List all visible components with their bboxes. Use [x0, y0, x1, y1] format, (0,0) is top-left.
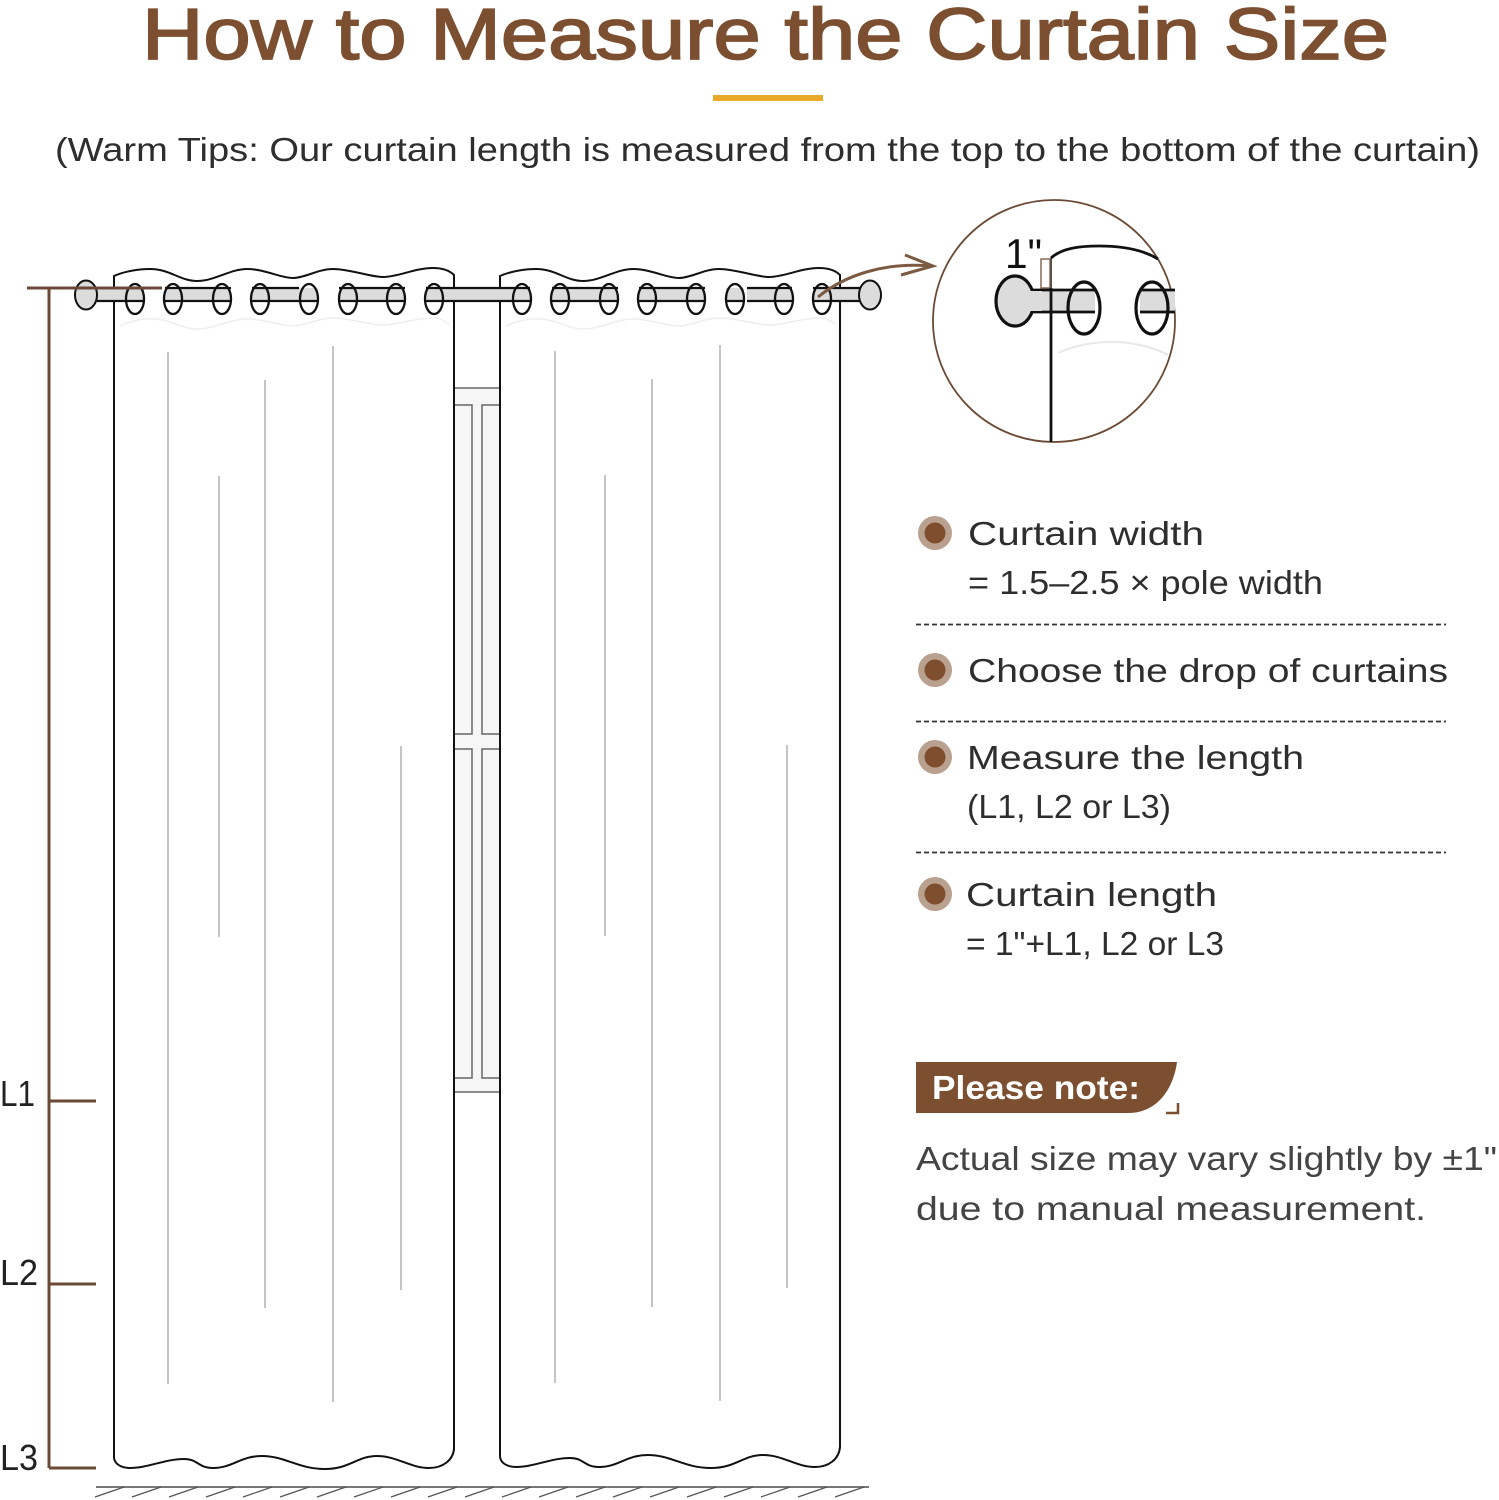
detail circle: 1 inch allowance — [933, 200, 1175, 442]
curtain: left panel — [114, 268, 454, 1469]
floor — [95, 1487, 869, 1497]
step: curtain width: Curtain width — [968, 515, 1204, 552]
note text — [916, 1140, 1497, 1227]
step: curtain length: = 1"+L1, L2 or L3 — [966, 925, 1224, 962]
window behind curtains — [454, 388, 500, 1092]
step: curtain width — [918, 515, 1323, 601]
step: measure the length — [918, 739, 1304, 825]
step: choose the drop: Choose the drop of curtains — [968, 652, 1448, 689]
title underline — [713, 95, 823, 101]
label L1: L1 — [0, 1073, 35, 1114]
curtain rod with grommets — [75, 280, 881, 314]
arrow to detail circle — [818, 255, 933, 297]
note text: due to manual measurement. — [916, 1190, 1426, 1227]
badge: please note — [916, 1062, 1178, 1113]
length ruler — [27, 288, 162, 1468]
note text: Actual size may vary slightly by ±1" — [916, 1140, 1497, 1177]
subtitle: warm tips: (Warm Tips: Our curtain length is measured from the top to the bottom of the curtain) — [55, 131, 1480, 168]
badge: please note: Please note: — [932, 1069, 1140, 1106]
step: measure the length: (L1, L2 or L3) — [967, 788, 1171, 825]
step: curtain length: Curtain length — [966, 876, 1217, 913]
label 1 inch: 1" — [1005, 230, 1042, 277]
step: measure the length: Measure the length — [967, 739, 1304, 776]
step: curtain width: = 1.5–2.5 × pole width — [968, 564, 1323, 601]
step: curtain length — [918, 876, 1224, 962]
label L3: L3 — [0, 1437, 38, 1478]
label L2: L2 — [0, 1252, 38, 1293]
curtain: right panel — [500, 268, 840, 1468]
